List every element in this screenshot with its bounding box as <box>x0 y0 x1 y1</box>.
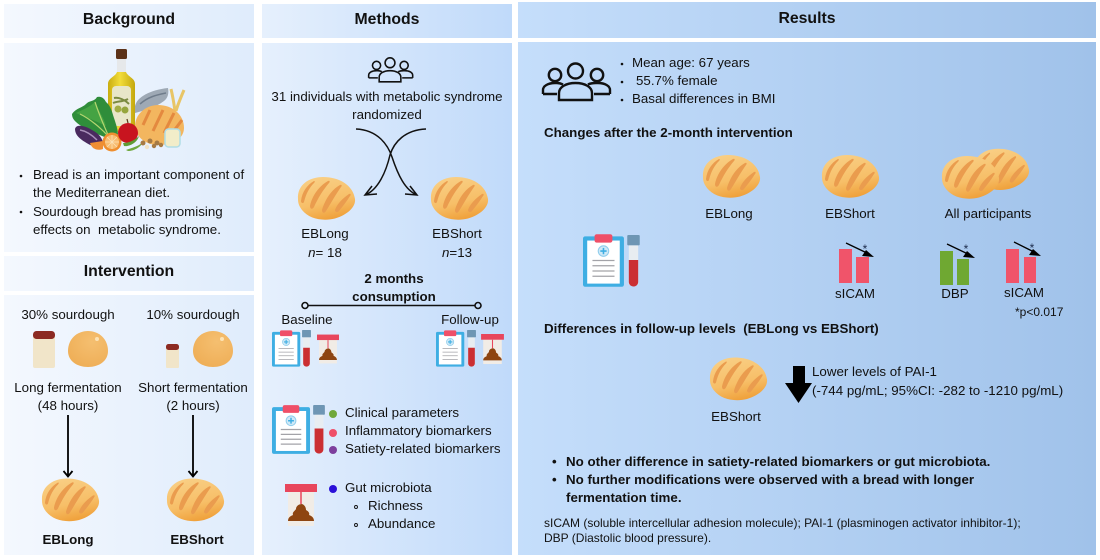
icon: clinical records and blood tube <box>583 234 640 287</box>
label: EBLong: EBLong <box>705 206 753 221</box>
text: long fermentation: (48 hours) <box>38 398 98 413</box>
bar chart: DBP all participants: * <box>964 242 969 256</box>
legend: clinical and biomarkers <box>329 405 501 456</box>
label: EBShort: EBShort <box>825 206 875 221</box>
label: EBShort n=13: EBShort <box>432 226 482 241</box>
text: abbreviations <box>544 516 1021 545</box>
text: PAI-1 result: (-744 pg/mL; 95%CI: -282 to -1210 pg/mL) <box>812 383 1063 398</box>
timeline <box>302 302 481 308</box>
text: participants: randomized <box>352 107 422 122</box>
panel: intervention header <box>4 256 254 291</box>
legend: gut microbiota: Abundance <box>368 516 435 531</box>
label: EBLong n=18 <box>301 226 349 260</box>
label: EBShort: EBShort <box>170 532 224 547</box>
icon: small sourdough jar <box>166 344 179 368</box>
text: further findings: • <box>552 454 557 469</box>
label: EBShort n=13 <box>432 226 482 260</box>
label: EBShort n=13: n=13 <box>442 245 472 260</box>
label: follow-up: Follow-up <box>441 312 499 327</box>
panel: methods <box>262 43 512 555</box>
bar chart: sICAM all participants <box>1004 241 1044 300</box>
bar chart: DBP all participants: DBP <box>941 286 969 301</box>
heading: Methods: Methods <box>355 11 420 28</box>
icon: participants <box>369 58 413 82</box>
bar chart: DBP all participants <box>940 242 975 301</box>
icon: bread EBShort <box>822 155 879 198</box>
bar chart: sICAM EBShort: * <box>863 242 868 256</box>
text: abbreviations: DBP (Diastolic blood pressure). <box>544 531 711 545</box>
text: short fermentation <box>138 380 248 413</box>
panel: background <box>4 43 254 252</box>
label: baseline: Baseline <box>281 312 333 327</box>
panel: methods header <box>262 4 512 38</box>
legend: clinical and biomarkers: Inflammatory biomarkers <box>345 423 492 438</box>
panel: results <box>518 42 1096 555</box>
arrow: to EBShort <box>188 415 198 476</box>
label: EBLong n=18: EBLong <box>301 226 349 241</box>
icon: large sourdough jar <box>33 331 55 368</box>
text: PAI-1 result <box>812 364 1063 398</box>
legend: gut microbiota: Richness <box>368 498 423 513</box>
icon: bun left <box>68 331 108 367</box>
arrow: to EBLong <box>64 415 72 476</box>
icon: baseline samples <box>272 330 339 367</box>
icon: Mediterranean food group <box>72 49 184 152</box>
label: EBShort: EBShort <box>711 409 761 424</box>
text: abbreviations: sICAM (soluble intercellular adhesion molecule); PAI-1 (plasminogen activator inhibitor-1); <box>544 516 1021 530</box>
icon: bread EBLong <box>42 478 99 521</box>
text: short fermentation: Short fermentation <box>138 380 248 395</box>
text: participants <box>271 89 503 122</box>
bar chart: sICAM all participants: sICAM <box>1004 285 1044 300</box>
text: background bullets: Sourdough bread has promising <box>33 204 223 219</box>
heading: Results: Results <box>778 10 836 27</box>
legend: clinical and biomarkers: Satiety-related biomarkers <box>345 441 501 456</box>
icon: bread EBShort <box>710 358 767 400</box>
text: background bullets <box>20 167 244 237</box>
arrow: lower PAI-1 <box>785 366 812 403</box>
text: further findings: No other difference in satiety-related biomarkers or gut microbiota. <box>566 454 990 469</box>
icon: bun right <box>193 331 233 367</box>
text: participant characteristics: 55.7% female <box>636 73 718 88</box>
icon: stool sample <box>285 484 317 526</box>
text: background bullets: effects on metabolic syndrome. <box>33 222 221 237</box>
icon: clinical records and blood tube <box>272 405 325 454</box>
text: long fermentation: Long fermentation <box>14 380 122 395</box>
heading: Background: Background <box>83 11 175 28</box>
legend: gut microbiota <box>329 480 435 531</box>
text: further findings <box>552 454 990 505</box>
icon: bread EBShort <box>431 177 488 220</box>
arrow: crossing randomisation <box>356 129 426 195</box>
icon: bread all participants <box>942 149 1029 199</box>
text: participant characteristics <box>621 55 775 106</box>
icon: bread EBLong <box>298 177 355 220</box>
heading: changes after intervention: Changes after the 2-month intervention <box>544 125 793 140</box>
icon: participants <box>543 64 610 100</box>
text: short fermentation: (2 hours) <box>166 398 220 413</box>
heading: follow-up differences: Differences in follow-up levels (EBLong vs EBShort) <box>544 321 879 336</box>
text: 2 months consumption: 2 months <box>364 271 424 286</box>
text: participants: 31 individuals with metabolic syndrome <box>271 89 503 104</box>
text: 2 months consumption: consumption <box>352 289 436 304</box>
text: participant characteristics: Basal differences in BMI <box>632 91 775 106</box>
panel: background header <box>4 4 254 38</box>
text: 2 months consumption <box>352 271 436 304</box>
label: EBLong: EBLong <box>42 532 94 547</box>
panel: intervention <box>4 295 254 555</box>
text: participant characteristics: Mean age: 67 years <box>632 55 750 70</box>
bar chart: sICAM EBShort: sICAM <box>835 286 875 301</box>
note: significance: *p<0.017 <box>1015 305 1064 319</box>
label: EBLong n=18: n= 18 <box>308 245 342 260</box>
icon: bread EBLong <box>703 155 760 198</box>
text: 30% sourdough: 30% sourdough <box>21 307 115 322</box>
legend: clinical and biomarkers: Clinical parameters <box>345 405 459 420</box>
icon: follow-up samples <box>436 330 504 367</box>
text: background bullets: the Mediterranean diet. <box>33 185 170 200</box>
heading: Intervention: Intervention <box>84 263 174 280</box>
text: PAI-1 result: Lower levels of PAI-1 <box>812 364 937 379</box>
text: further findings: fermentation time. <box>566 490 682 505</box>
text: 10% sourdough: 10% sourdough <box>146 307 240 322</box>
label: all participants: All participants <box>945 206 1032 221</box>
text: further findings: • <box>552 472 557 487</box>
panel: results header <box>518 2 1096 38</box>
text: long fermentation <box>14 380 122 413</box>
bar chart: sICAM EBShort <box>835 242 875 301</box>
icon: bread EBShort <box>167 478 224 521</box>
text: background bullets: Bread is an important component of <box>33 167 244 182</box>
legend: gut microbiota: Gut microbiota <box>345 480 432 495</box>
bar chart: sICAM all participants: * <box>1030 241 1035 255</box>
text: further findings: No further modifications were observed with a bread with longer <box>566 472 974 487</box>
